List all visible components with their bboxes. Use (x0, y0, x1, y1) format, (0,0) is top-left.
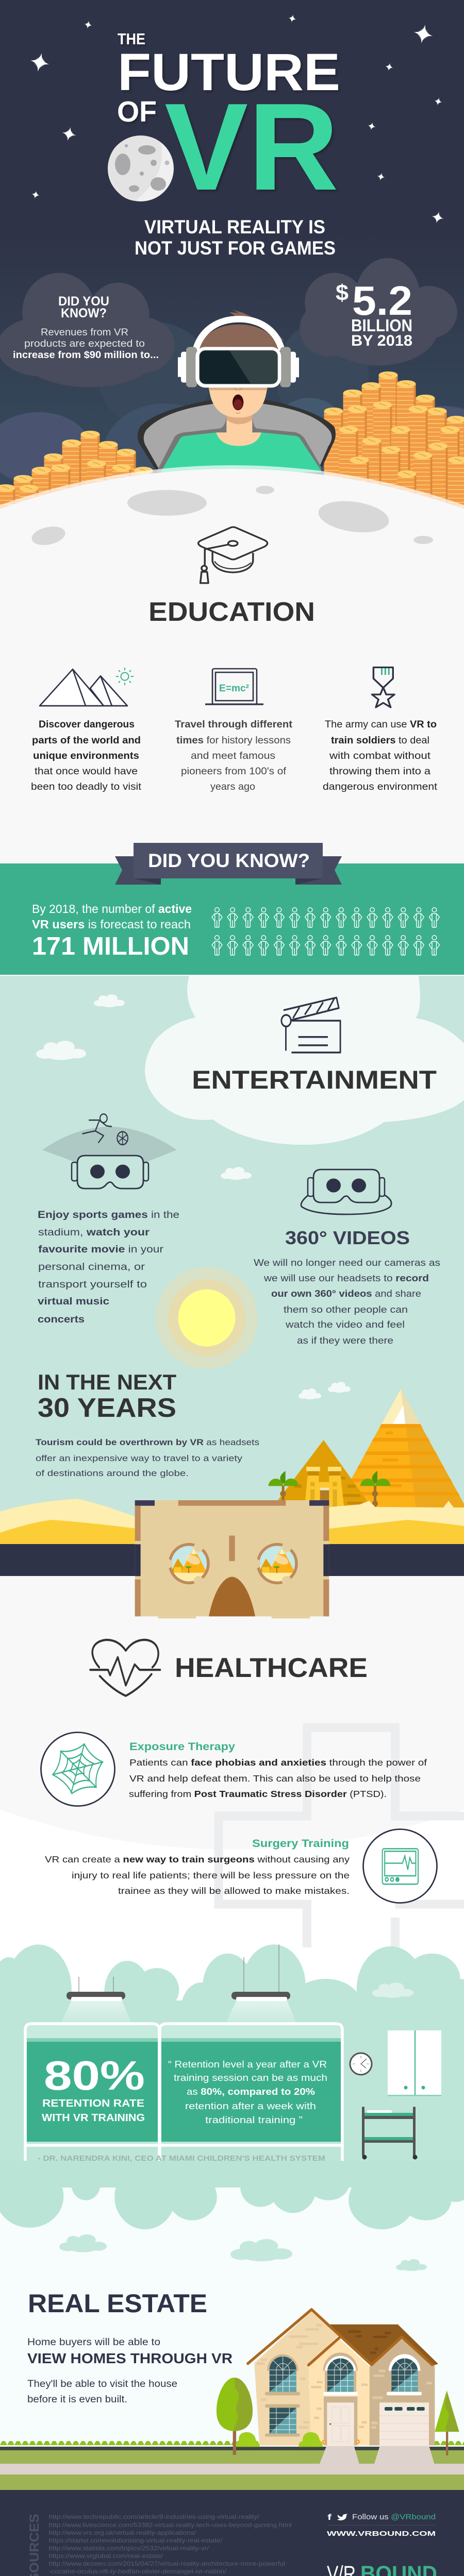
text: sports games: Enjoy sports games in the (38, 1210, 179, 1221)
text: army training: with combat without (329, 751, 431, 761)
forecast text: 171 MILLION (32, 933, 189, 960)
stars (28, 14, 445, 225)
small clouds (59, 2234, 427, 2271)
sun (156, 1267, 258, 1369)
quote: traditional training ” (205, 2115, 303, 2125)
text: surgery training (45, 1838, 350, 1896)
sources list: http://www.vrs.org.uk/virtual-reality-applications/ (48, 2529, 196, 2536)
social links: Follow us @VRbound (352, 2513, 436, 2521)
education background and moon craters (0, 486, 464, 866)
text: view homes: before it is even built. (27, 2394, 127, 2405)
window left upper (265, 2354, 300, 2395)
text: exposure therapy: Exposure Therapy (129, 1741, 235, 1753)
title: FUTURE (118, 43, 340, 101)
moon illustration (108, 135, 174, 201)
text: view homes: Home buyers will be able to (27, 2337, 160, 2348)
icon: heart with pulse (90, 1640, 160, 1696)
title (117, 30, 340, 216)
quote: “ Retention level a year after a VR (168, 2059, 327, 2070)
text: exposure therapy: Patients can face phobias and anxieties through the power of (129, 1757, 427, 1768)
sources list: http://www.statista.com/topics/2532/virtual-reality-vr/ (48, 2545, 209, 2552)
text: time travel: times for history lessons (176, 735, 291, 746)
sources list: https://www.vrglobal.com/real-estate/ (48, 2552, 163, 2560)
text: time travel: pioneers from 100's of (181, 766, 287, 777)
front door (324, 2397, 357, 2446)
forecast text (32, 902, 192, 960)
garage door (379, 2402, 429, 2446)
driveway and path (320, 2446, 434, 2464)
heading: entertainment: ENTERTAINMENT (192, 1065, 437, 1094)
text: view homes: They'll be able to visit the house (27, 2379, 177, 2389)
text: exposure therapy: VR and help defeat them. This can also be used to help those (129, 1773, 421, 1784)
mint background (0, 976, 464, 1522)
text: tourism: of destinations around the globe. (36, 1468, 189, 1478)
text: 360 videos: as if they were there (297, 1335, 393, 1346)
cardboard VR viewer (135, 1500, 329, 1618)
dark band (0, 1544, 464, 1576)
text: time travel (175, 719, 293, 792)
icon: stadium view through headset (42, 1114, 177, 1189)
pictogram: people (212, 908, 439, 955)
illustration: pyramids and palms (269, 1389, 464, 1509)
green band background (0, 863, 464, 975)
did you know band (0, 843, 464, 975)
text: army training (323, 719, 438, 792)
night sky background (0, 0, 464, 520)
subtitle: VIRTUAL REALITY IS (144, 216, 325, 238)
left thought cloud: increase from $90 million to... (13, 350, 159, 361)
quote: retention after a week with (185, 2101, 316, 2111)
bushes and flowers (236, 2432, 360, 2447)
text: surgery training: VR can create a new way to train surgeons without causing any (45, 1854, 350, 1865)
quote attribution: - DR. NARENDRA KINI, CEO AT MIAMI CHILDREN'S HEALTH SYSTEM (38, 2154, 325, 2163)
text: view homes: VIEW HOMES THROUGH VR (27, 2350, 233, 2366)
quote (168, 2059, 327, 2125)
icon: spider web (41, 1732, 114, 1806)
text: dangerous environments (31, 719, 142, 792)
ribbon banner (115, 843, 342, 885)
heading: in the next 30 years (38, 1370, 176, 1423)
subtitle (135, 216, 336, 259)
text: army training: train soldiers to deal (331, 735, 429, 746)
stat: 80 percent: WITH VR TRAINING (42, 2112, 145, 2124)
text: view homes (27, 2337, 233, 2405)
small clouds (36, 994, 351, 1399)
stat: 80 percent: RETENTION RATE (42, 2098, 144, 2109)
left thought cloud: Revenues from VR (41, 327, 128, 338)
illustration: house with trees (217, 2310, 459, 2464)
text: tourism: offer an inexpensive way to travel to a variety (36, 1453, 243, 1463)
background medical cross outline (219, 1727, 464, 1958)
text: army training: The army can use VR to (325, 719, 437, 730)
real estate page background (0, 2164, 464, 2494)
quote: training session can be as much (174, 2073, 327, 2083)
icon: military medal (372, 667, 394, 707)
text: tourism: Tourism could be overthrown by VR as headsets (36, 1437, 259, 1447)
education section (31, 527, 438, 792)
heading: healthcare: HEALTHCARE (175, 1653, 368, 1683)
right thought cloud: $ (336, 280, 349, 306)
moon surface ground (0, 465, 464, 1853)
sources list: http://www.dezeen.com/2015/04/27/virtual-reality-architecture-more-powerful (48, 2560, 285, 2567)
retention statistic panel frames (24, 2024, 344, 2161)
heading: education: EDUCATION (148, 597, 315, 627)
sources list: -cocaine-oculus-rift-ty-hedfan-olivier-demangel-ivr-nation/ (48, 2568, 227, 2575)
sources list: http://www.techrepublic.com/article/9-industries-using-virtual-reality/ (48, 2513, 260, 2520)
forecast text: VR users is forecast to reach (32, 918, 191, 931)
text: dangerous environments: been too deadly to visit (31, 782, 142, 792)
text: time travel: Travel through different (175, 719, 293, 730)
footer background (0, 2490, 464, 2576)
text: sports games: stadium, watch your (38, 1227, 150, 1238)
icon: 360 headset (301, 1170, 391, 1214)
tree left (217, 2378, 253, 2455)
social links (327, 2513, 436, 2522)
text: exposure therapy: suffering from Post Traumatic Stress Disorder (PTSD). (129, 1789, 387, 1799)
text: sports games (38, 1210, 179, 1325)
left thought cloud: KNOW? (61, 306, 107, 320)
small cloud (372, 1982, 413, 1998)
text: 360 videos: our own 360° videos and share (271, 1289, 421, 1299)
text: dangerous environments: unique environments (33, 751, 139, 761)
left thought cloud: DID YOU (58, 294, 109, 309)
background hills (0, 322, 464, 503)
entertainment section (0, 976, 464, 1546)
sources list: https://startvr.co/revolutionising-virtual-reality-real-estate/ (48, 2537, 223, 2544)
quote: as 80%, compared to 20% (187, 2087, 315, 2097)
window centre (323, 2352, 358, 2396)
ribbon banner: DID YOU KNOW? (148, 850, 310, 871)
text: surgery training: Surgery Training (252, 1838, 349, 1850)
logo: VR Bound (327, 2562, 437, 2576)
right coin stacks (324, 371, 464, 592)
text: sports games: concerts (38, 1314, 85, 1325)
text: 360 videos: we will use our headsets to record (263, 1273, 429, 1283)
icon: pyramids and sun (40, 668, 134, 706)
icon: laptop with equation (205, 669, 263, 704)
website: WWW.VRBOUND.COM (327, 2530, 436, 2537)
real estate section (0, 2234, 464, 2490)
green clouds back layer (0, 1944, 464, 2087)
window left lower (265, 2404, 300, 2436)
text: time travel: and meet famous (191, 751, 275, 761)
text: 360 videos: watch the video and feel (285, 1319, 405, 1330)
hero section (0, 0, 464, 1853)
text: dangerous environments: parts of the world and (32, 735, 141, 746)
text: 360 videos: We will no longer need our cameras as (254, 1258, 440, 1268)
left thought cloud: products are expected to (24, 338, 145, 349)
sources list (48, 2513, 292, 2576)
heading: real estate: REAL ESTATE (28, 2289, 207, 2318)
right thought cloud: BY 2018 (351, 332, 412, 349)
icon: clapperboard (281, 997, 340, 1053)
text: time travel: years ago (210, 782, 255, 792)
footer (0, 2490, 464, 2576)
forecast text: By 2018, the number of active (32, 902, 192, 916)
right thought cloud: 5.2 (352, 278, 412, 324)
hospital room scene (0, 1944, 464, 2229)
window right (387, 2354, 422, 2395)
text: exposure therapy (129, 1741, 427, 1799)
social links: f (327, 2513, 332, 2522)
text: sports games: transport yourself to (38, 1279, 147, 1290)
right thought cloud: BILLION (351, 316, 412, 335)
text: army training: throwing them into a (329, 766, 430, 777)
icon: heart monitor (363, 1829, 437, 1903)
tree right (435, 2391, 459, 2455)
stat: 80 percent: 80% (44, 2053, 145, 2098)
text: dangerous environments: that once would have (35, 766, 138, 777)
heading: in the next 30 years: 30 YEARS (38, 1393, 176, 1423)
title: THE (118, 30, 145, 48)
text: sports games: virtual music (38, 1296, 110, 1307)
big heading cloud (145, 976, 464, 1145)
text: dangerous environments: Discover dangerous (39, 719, 135, 730)
text: tourism (36, 1437, 259, 1478)
healthcare section (41, 1640, 464, 1958)
ceiling lamps (57, 1944, 300, 2032)
left thought cloud (0, 273, 175, 387)
left coin stacks (0, 431, 153, 607)
text: sports games: personal cinema, or (38, 1262, 145, 1273)
text: sports games: favourite movie in your (38, 1244, 164, 1255)
medical cabinet (388, 2030, 441, 2096)
title: VR (164, 78, 339, 216)
text: 360 videos: them so other people can (284, 1304, 408, 1315)
hospital bed (362, 2107, 418, 2160)
right thought cloud (300, 258, 457, 365)
text: army training: dangerous environment (323, 782, 438, 792)
title: OF (117, 95, 157, 128)
subtitle: NOT JUST FOR GAMES (135, 238, 336, 259)
wall clock (350, 2053, 372, 2075)
text: 360 videos (254, 1258, 440, 1346)
heading: 360 videos: 360° VIDEOS (285, 1227, 410, 1248)
sources list: http://www.livescience.com/53392-virtual-reality-tech-uses-beyond-gaming.html (48, 2521, 292, 2529)
icon: graduation cap (198, 527, 268, 583)
heading: in the next 30 years: IN THE NEXT (38, 1370, 176, 1394)
desert sand (0, 1499, 464, 1546)
text: surgery training: injury to real life patients; there will be less pressure on the (72, 1870, 350, 1880)
stat: 80 percent (42, 2053, 145, 2124)
person wearing VR headset in chair (138, 310, 336, 472)
ground: road and lawn (0, 2441, 464, 2490)
green clouds front layer (0, 2161, 464, 2229)
icon: laptop with equation: E=mc² (219, 683, 249, 694)
text: surgery training: trainee as they will be allowed to make mistakes. (118, 1886, 350, 1896)
